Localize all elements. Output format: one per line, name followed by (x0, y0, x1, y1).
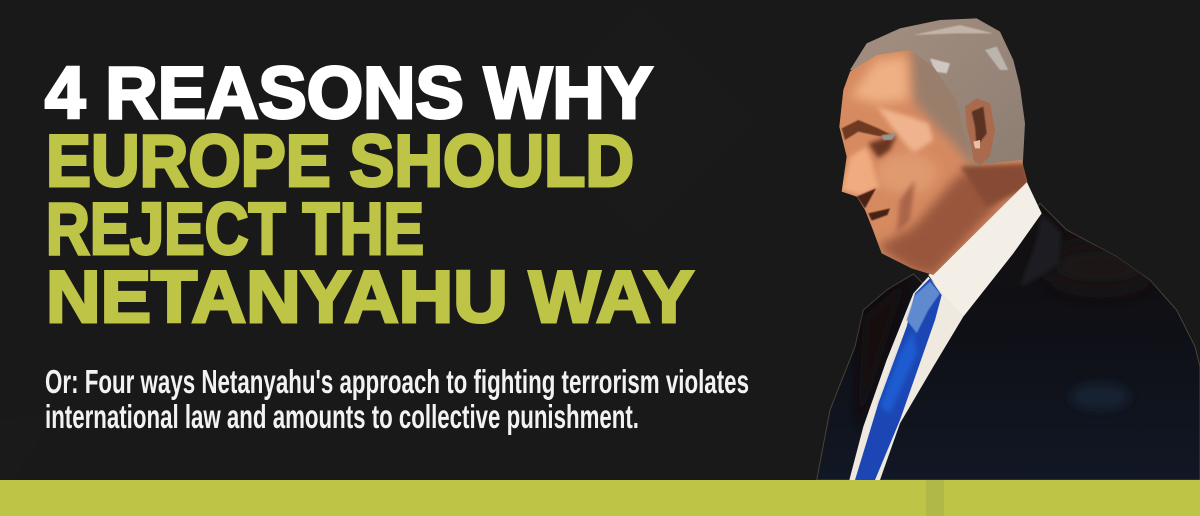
shirt front (849, 277, 963, 480)
jaw shadow (877, 173, 1027, 277)
side of head grey fade (910, 43, 977, 173)
forehead highlight (850, 57, 908, 103)
footer band darker segment (926, 480, 944, 516)
title line: Netanyahu Way: NETANYAHU WAY (46, 257, 694, 338)
title line: Reject The: REJECT THE (46, 189, 424, 270)
necktie (855, 278, 942, 480)
eyebrow and eye (842, 120, 897, 158)
nose highlight (842, 147, 880, 195)
title line: Europe Should: EUROPE SHOULD (46, 121, 634, 202)
cheek (877, 153, 937, 193)
subtitle line 2: international law and amounts to collective punishment. (45, 398, 639, 435)
portrait of Netanyahu (817, 18, 1200, 480)
suit jacket (817, 203, 1200, 480)
nose shadow and mouth (857, 180, 915, 233)
title line: 4 Reasons Why: 4 REASONS WHY (45, 53, 653, 134)
green footer band (0, 480, 1200, 516)
hair (850, 18, 1025, 167)
face and neck (839, 43, 1030, 277)
title (45, 53, 694, 338)
subtitle line 1: Or: Four ways Netanyahu's approach to fighting terrorism violates (45, 363, 749, 400)
shirt collar (928, 182, 1042, 317)
ear (965, 98, 995, 165)
subtitle (45, 363, 749, 435)
